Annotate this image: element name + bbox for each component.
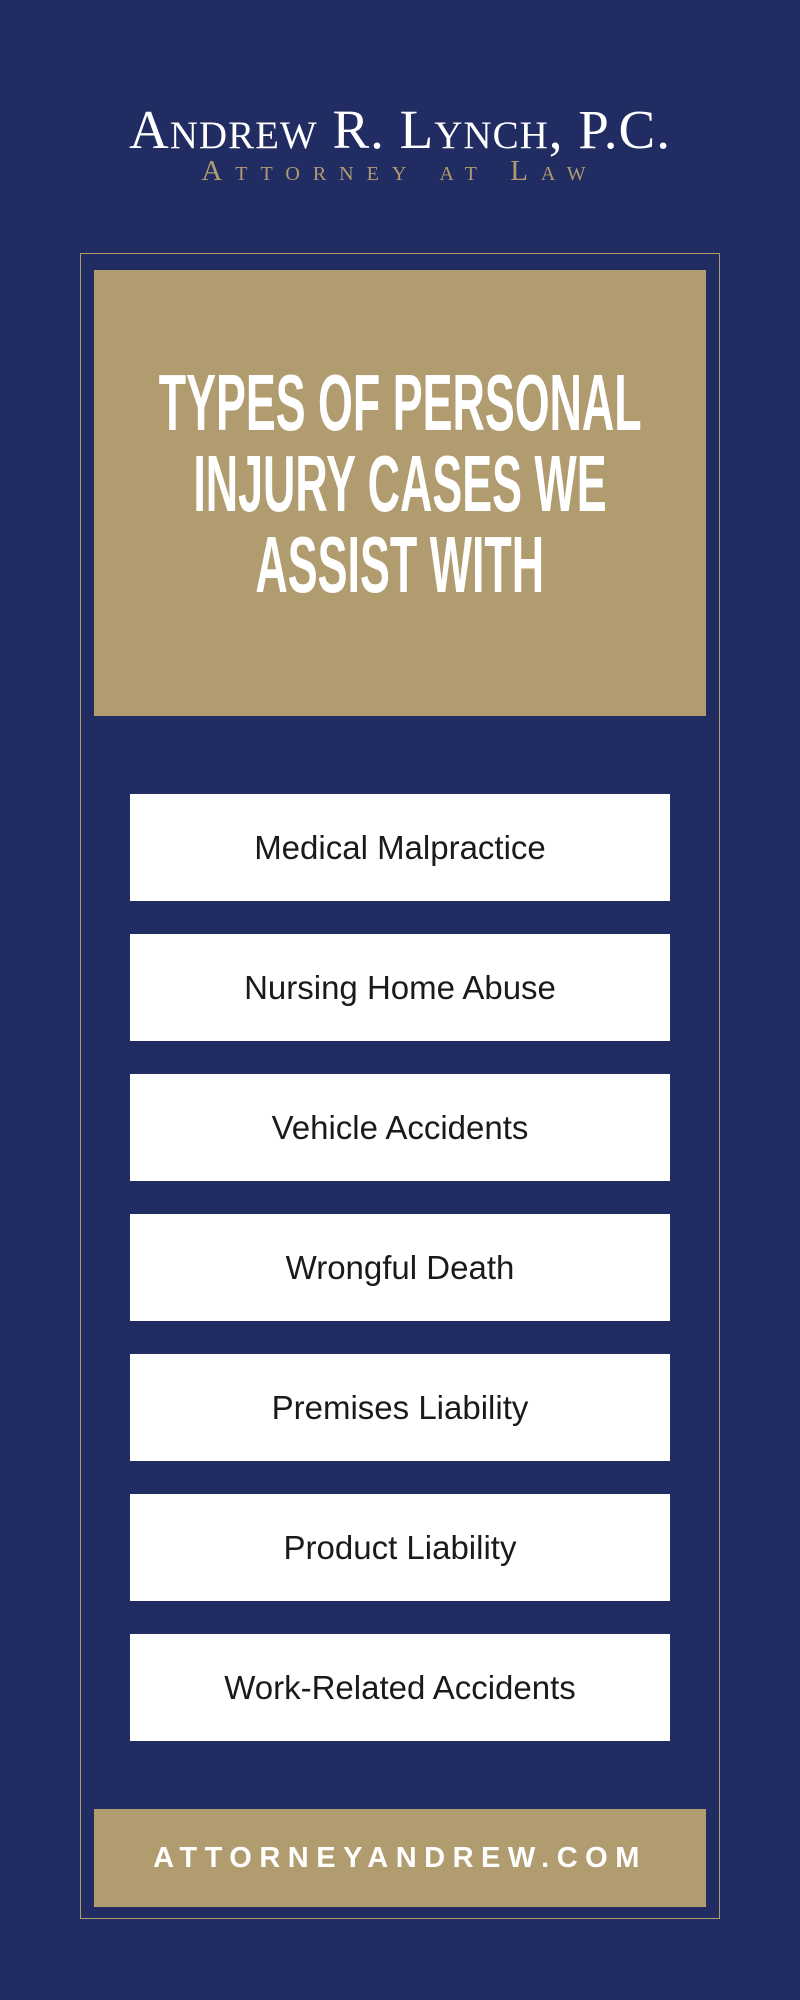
item: nursing home abuse (130, 934, 670, 1041)
item: premises liability (130, 1354, 670, 1461)
title: TYPES OF PERSONAL (159, 358, 641, 447)
item: work-related accidents (130, 1634, 670, 1741)
header panel (94, 270, 706, 716)
title (159, 358, 641, 609)
logo (129, 99, 671, 187)
item: wrongful death (130, 1214, 670, 1321)
title: ASSIST WITH (256, 520, 544, 609)
item: medical malpractice: Medical Malpractice (254, 829, 546, 866)
item: wrongful death: Wrongful Death (286, 1249, 514, 1286)
item: vehicle accidents (130, 1074, 670, 1181)
item: work-related accidents: Work-Related Accidents (224, 1669, 576, 1706)
footer website (94, 1809, 706, 1907)
title: INJURY CASES WE (193, 439, 607, 528)
item: premises liability: Premises Liability (272, 1389, 528, 1426)
logo name: Andrew R. Lynch, P.C. (129, 99, 671, 160)
logo subtitle: Attorney at Law (201, 155, 599, 187)
item: vehicle accidents: Vehicle Accidents (272, 1109, 528, 1146)
footer website: ATTORNEYANDREW.COM (153, 1842, 647, 1874)
item: product liability (130, 1494, 670, 1601)
item: medical malpractice (130, 794, 670, 901)
frame border (80, 253, 720, 1919)
item: product liability: Product Liability (284, 1529, 516, 1566)
item: nursing home abuse: Nursing Home Abuse (244, 969, 556, 1006)
